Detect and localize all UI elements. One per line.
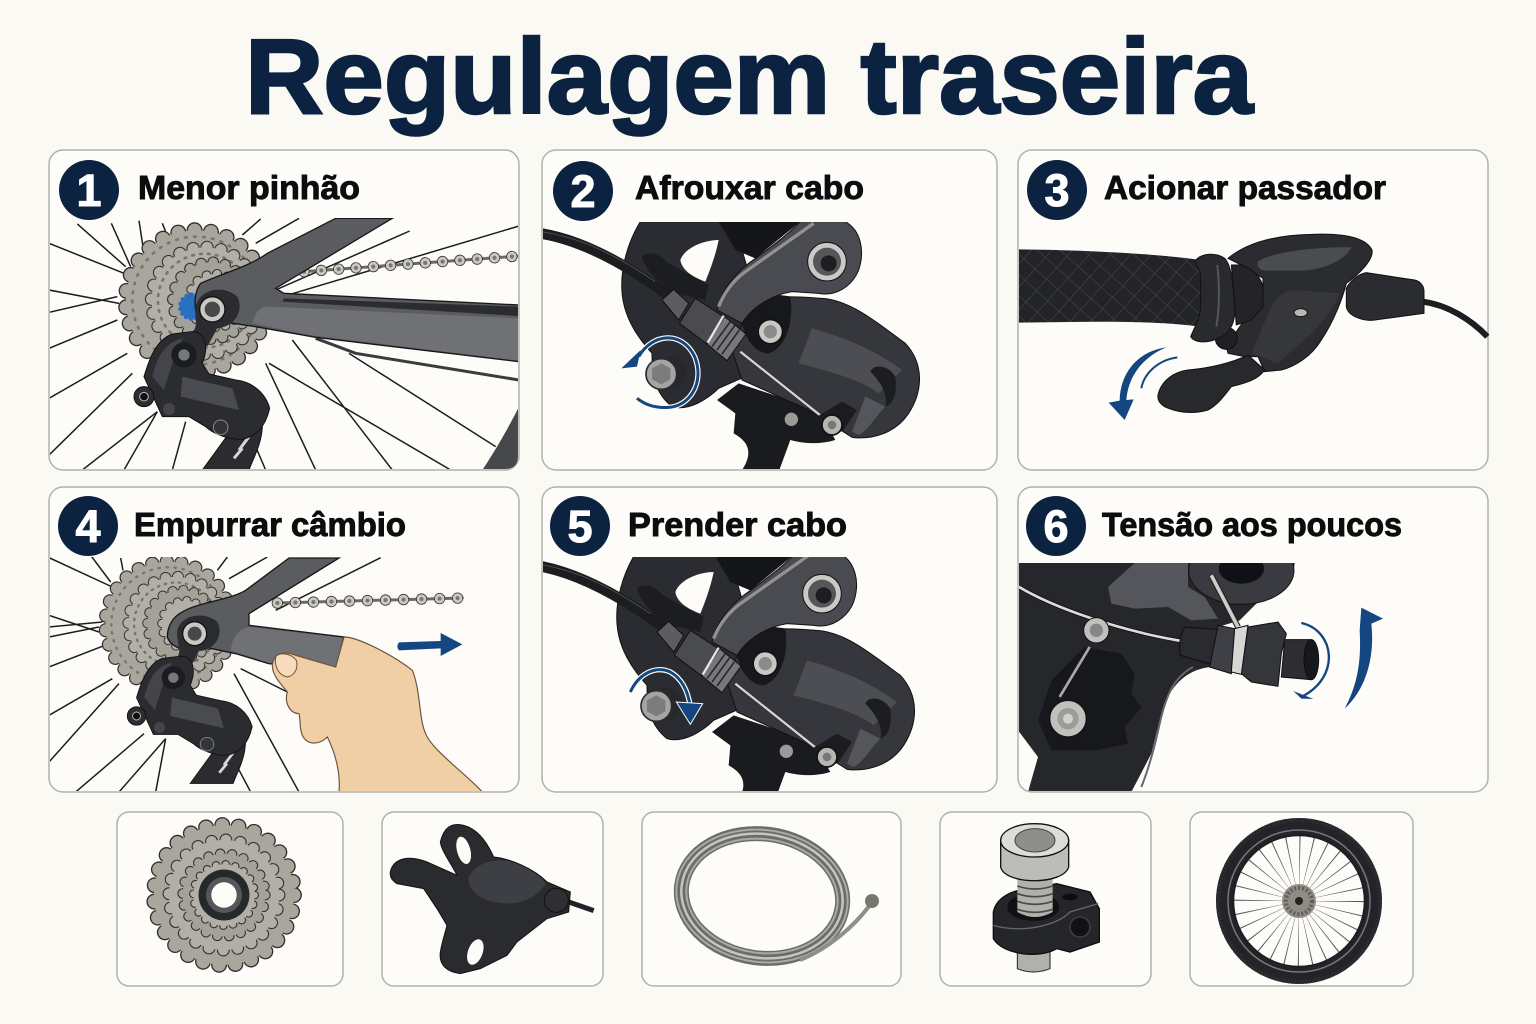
top bracket	[1188, 563, 1294, 605]
step badge 3	[1027, 160, 1087, 220]
blue right arrow	[397, 633, 462, 656]
step 2 label: Afrouxar cabo	[635, 169, 864, 206]
parts panel: shifter	[382, 812, 603, 986]
icon: cassette	[154, 825, 294, 965]
derailleur body close-up	[1018, 563, 1295, 792]
step 5 label: Prender cabo	[628, 506, 847, 543]
step badge 2	[553, 161, 613, 221]
axle and hanger	[192, 290, 240, 347]
chain	[277, 598, 462, 603]
cassette	[126, 230, 267, 371]
step 1 label: Menor pinhão	[138, 169, 360, 206]
parts panel: cassette	[117, 812, 343, 986]
blue counter-clockwise arrow	[621, 338, 698, 408]
rear wheel spokes	[49, 218, 519, 470]
large bolt	[1050, 700, 1086, 737]
blue clockwise arrow	[630, 670, 703, 724]
step 4 label: Empurrar câmbio	[134, 506, 406, 543]
parts panel: wheel	[1190, 812, 1413, 986]
panel: step 3 acionar passador	[1018, 150, 1488, 470]
icon: clamp bolt	[993, 824, 1099, 972]
rear derailleur	[127, 656, 252, 783]
panel: step 5 prender cabo	[535, 487, 997, 802]
link rod	[1060, 647, 1090, 697]
derailleur close-up	[535, 554, 915, 802]
step badge 1	[59, 160, 119, 220]
step 6 label: Tensão aos poucos	[1102, 506, 1402, 543]
barrel adjuster	[1180, 622, 1319, 686]
step badge 4: 4	[75, 501, 101, 552]
thumb detail	[275, 654, 297, 677]
title: Regulagem traseira	[245, 18, 1254, 136]
parts panel: clamp bolt	[940, 812, 1151, 986]
thumb lever	[1158, 355, 1265, 412]
cog behind bolt	[1038, 647, 1141, 750]
step badge 4	[58, 496, 118, 556]
rear tyre arc	[482, 407, 519, 470]
cable under stay	[316, 338, 519, 380]
shifter body	[1191, 234, 1372, 372]
cable connector	[1346, 273, 1424, 320]
step badge 2: 2	[570, 166, 596, 217]
icon: shifter lever	[390, 824, 594, 974]
icon: rear wheel	[1218, 820, 1380, 982]
wheel spokes	[49, 555, 381, 792]
step badge 6: 6	[1043, 501, 1069, 552]
cable	[1423, 302, 1487, 337]
axle and hanger	[177, 616, 220, 667]
step badge 5	[550, 496, 610, 556]
cassette	[106, 562, 231, 687]
panel: step 2 afrouxar cabo	[540, 150, 997, 470]
blue rotation arrows	[1293, 608, 1383, 709]
handlebar grip	[1019, 249, 1201, 327]
panel: step 1 menor pinhão	[49, 150, 519, 470]
step badge 1: 1	[76, 165, 102, 216]
step badge 6	[1026, 496, 1086, 556]
arm edge highlight	[1141, 667, 1193, 787]
hand	[272, 637, 482, 792]
panel: step 4 empurrar câmbio	[49, 487, 519, 792]
step badge 5: 5	[567, 501, 593, 552]
blue downward arrow	[1109, 347, 1177, 420]
inner cable	[1016, 585, 1181, 641]
rear derailleur	[134, 332, 270, 470]
screw	[1294, 309, 1307, 317]
pin	[1211, 575, 1238, 627]
panel: step 6 tensão aos poucos	[1016, 487, 1488, 792]
step 3 label: Acionar passador	[1104, 169, 1386, 206]
blue spacer	[180, 295, 204, 319]
upper arm highlight	[1108, 563, 1218, 620]
frame stay	[167, 558, 344, 667]
icon: coiled cable	[668, 819, 879, 973]
chain	[304, 256, 519, 272]
derailleur close-up	[540, 222, 920, 470]
step badge 3: 3	[1044, 165, 1070, 216]
small bolt	[1084, 618, 1109, 643]
parts panel: cable	[642, 812, 901, 986]
frame stays	[195, 218, 519, 362]
